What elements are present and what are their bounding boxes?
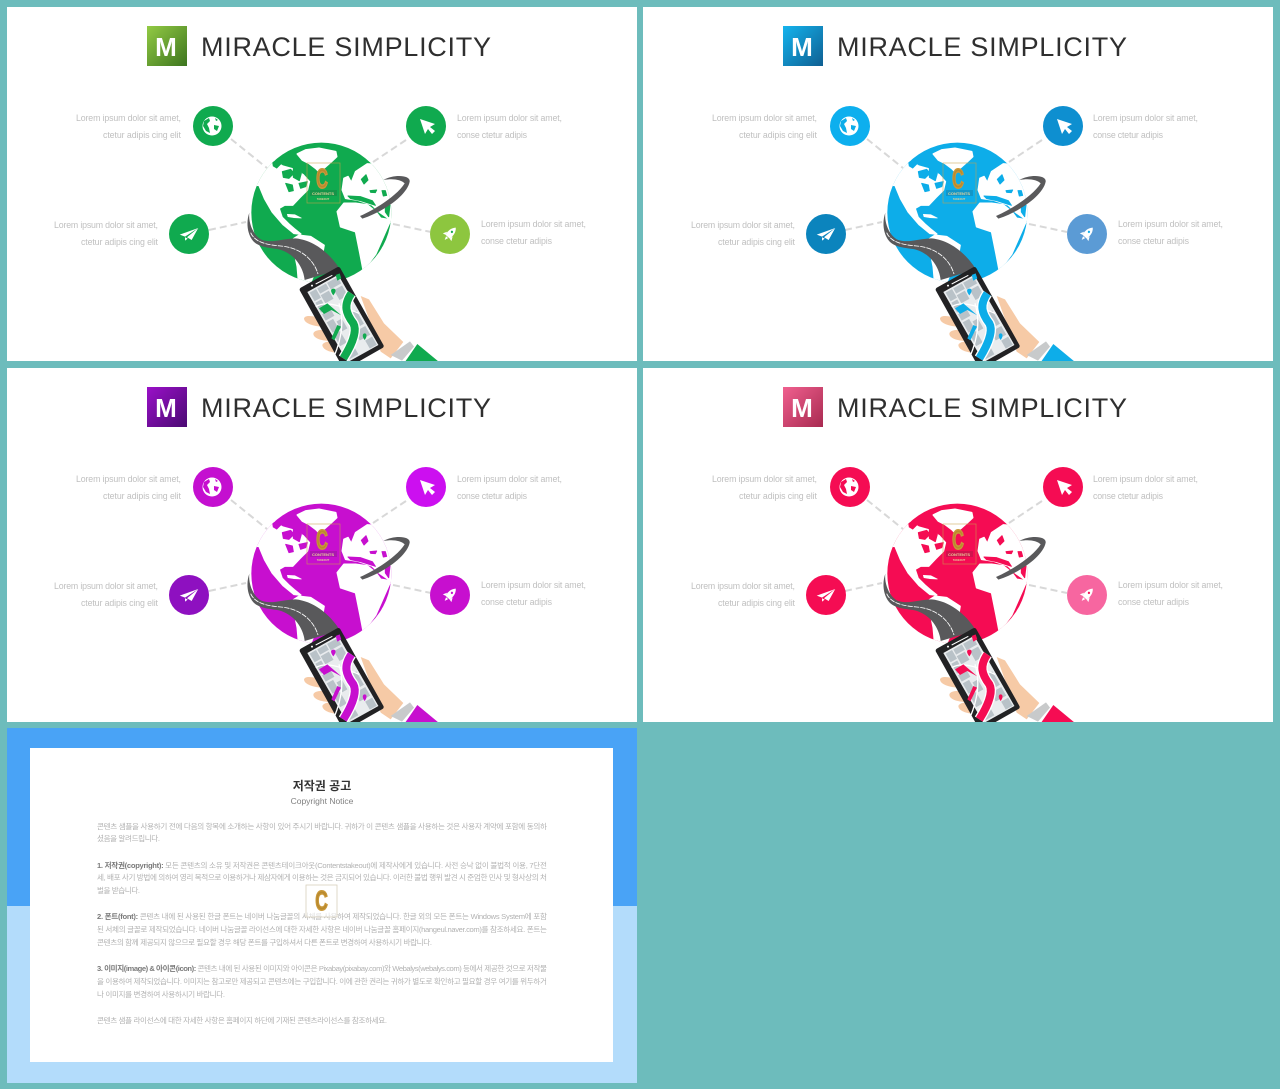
text block: copyright (97, 860, 547, 895)
text block: top left: Lorem ipsum dolor sit amet, (712, 474, 817, 484)
icon: paper plane (806, 575, 846, 615)
phone in hand (302, 269, 441, 367)
icon: M badge (147, 387, 187, 427)
text block: image and icon: 3. 이미지(image) & 아이콘(icon): 콘텐츠 내에 된 사용된 이미지와 아이콘은 Pixabay(pixabay.com)와 Webalys(webalys.com) 등에서 제공한 것으로 저작물 (97, 963, 547, 973)
text block: top right: Lorem ipsum dolor sit amet, (457, 474, 562, 484)
logo mark (306, 885, 337, 917)
icon: globe (830, 106, 870, 146)
text block: image and icon: 을 이용하여 제작되었습니다. 이미지는 참고로만 제공되고 콘텐츠에는 구입합니다. 이에 관한 권리는 귀하가 별도로 확인하고 필요할 경우 여기를 위두하거 (97, 976, 547, 986)
icon: rocket (430, 575, 470, 615)
globe with road (880, 504, 1046, 648)
text block: top right: conse ctetur adipis (457, 130, 528, 140)
icon: rocket (1067, 214, 1107, 254)
text block: top left (712, 113, 818, 140)
text block: top left: Lorem ipsum dolor sit amet, (712, 113, 817, 123)
heading: copyright notice (291, 778, 354, 806)
text block: image and icon (97, 963, 547, 999)
icon: cursor (406, 106, 446, 146)
icon: globe (193, 467, 233, 507)
title: MIRACLE SIMPLICITY (837, 32, 1127, 62)
icon: M badge (783, 26, 823, 66)
heading: copyright notice: Copyright Notice (291, 796, 354, 806)
text block: bottom right: conse ctetur adipis (481, 236, 553, 246)
icon: paper plane (169, 575, 209, 615)
text block: bottom right (1118, 219, 1223, 246)
text block: copyright: 1. 저작권(copyright): 모든 콘텐츠의 소유 및 저작권은 콘텐츠테이크아웃(Contentstakeout)에 제작사에게 있습니다. 사전 승낙 없이 불법적 이용, 7단전 (97, 860, 547, 870)
text block: bottom left (691, 220, 796, 247)
text block: copyright: 벌을 받습니다. (97, 885, 140, 895)
globe with road (244, 143, 410, 287)
logo mark (307, 162, 340, 203)
text block: top right (1093, 113, 1198, 140)
text block: bottom right (481, 580, 586, 607)
text block: bottom right: conse ctetur adipis (1118, 597, 1190, 607)
icon: rocket (430, 214, 470, 254)
text block: bottom left: Lorem ipsum dolor sit amet, (54, 581, 158, 591)
text block: bottom right: conse ctetur adipis (481, 597, 553, 607)
text block: top right: Lorem ipsum dolor sit amet, (457, 113, 562, 123)
text block: intro (97, 821, 547, 843)
text block: font: 된 서체의 글꼴로 제작되었습니다. 네이버 나눔글꼴 라이선스에 대한 자세한 사항은 네이버 나눔글꼴 홈페이지(hangeul.naver.com)를 참조하세요. 폰트는 (97, 924, 547, 934)
text block: font: 2. 폰트(font): 콘텐츠 내에 된 사용된 한글 폰트는 네이버 나눔글꼴의 서체를 사용하여 제작되었습니다. 한글 외의 모든 폰트는 Windows System에 포함 (97, 911, 547, 921)
logo mark: C (315, 885, 328, 916)
text block: top right: conse ctetur adipis (457, 491, 528, 501)
text block: bottom right: Lorem ipsum dolor sit amet, (1118, 580, 1223, 590)
text block: top right (457, 113, 562, 140)
title: MIRACLE SIMPLICITY (201, 393, 491, 423)
text block: top right: conse ctetur adipis (1093, 491, 1164, 501)
text block: top left: ctetur adipis cing elit (739, 130, 818, 140)
icon: cursor (406, 467, 446, 507)
icon: globe (193, 106, 233, 146)
text block: top left: Lorem ipsum dolor sit amet, (76, 474, 181, 484)
heading: copyright notice: 저작권 공고 (293, 778, 351, 793)
text block: top left (76, 113, 182, 140)
panel: pink slide (643, 368, 1274, 728)
text block: bottom right: Lorem ipsum dolor sit amet, (1118, 219, 1223, 229)
text block: bottom right: Lorem ipsum dolor sit amet, (481, 219, 586, 229)
icon: cursor (1043, 467, 1083, 507)
title: MIRACLE SIMPLICITY (837, 393, 1127, 423)
panel: green slide (7, 7, 637, 367)
text block: top left: Lorem ipsum dolor sit amet, (76, 113, 181, 123)
icon: paper plane (806, 214, 846, 254)
title: MIRACLE SIMPLICITY (201, 32, 491, 62)
text block: bottom left (691, 581, 796, 608)
icon: M badge (783, 387, 823, 427)
text block: top left: ctetur adipis cing elit (739, 491, 818, 501)
icon: paper plane (169, 214, 209, 254)
icon: rocket (1067, 575, 1107, 615)
text block: bottom right (481, 219, 586, 246)
text block: top left (76, 474, 182, 501)
text block: top right: Lorem ipsum dolor sit amet, (1093, 113, 1198, 123)
phone in hand (938, 269, 1077, 367)
text block: bottom left (54, 220, 159, 247)
text block: copyright: 세, 배포 사기 방법에 의하여 영리 목적으로 이용하거나 제삼자에게 이용하는 것은 금지되어 있습니다. 이러한 불법 행위 발견 시 준엄한 민사 및 형사상의 처 (97, 872, 547, 882)
globe with road (244, 504, 410, 648)
text block: bottom left: Lorem ipsum dolor sit amet, (691, 220, 795, 230)
text block: top left (712, 474, 818, 501)
icon: cursor (1043, 106, 1083, 146)
text block: top right (457, 474, 562, 501)
text block: top right: Lorem ipsum dolor sit amet, (1093, 474, 1198, 484)
text block: top right: conse ctetur adipis (1093, 130, 1164, 140)
text block: bottom left: ctetur adipis cing elit (718, 598, 796, 608)
text block: bottom left (54, 581, 159, 608)
panel: purple slide (7, 368, 637, 728)
text block: font (97, 911, 547, 947)
logo mark (307, 523, 340, 564)
text block: bottom right (1118, 580, 1223, 607)
icon: M badge: M (791, 393, 813, 423)
text block: intro: 콘텐츠 샘플을 사용하기 전에 다음의 항목에 소개하는 사항이 있어 주시기 바랍니다. 귀하가 이 콘텐츠 샘플을 사용하는 것은 사용자 계약에 포함에 동의하 (97, 821, 547, 831)
text block: bottom right: Lorem ipsum dolor sit amet, (481, 580, 586, 590)
logo mark (943, 523, 976, 564)
text block: bottom left: Lorem ipsum dolor sit amet, (54, 220, 158, 230)
text block: top left: ctetur adipis cing elit (103, 491, 182, 501)
panel: blue slide (643, 7, 1274, 367)
text block: image and icon: 나 이미지를 변경하여 사용하시기 바랍니다. (97, 989, 225, 999)
text block: top right (1093, 474, 1198, 501)
text block: font: 콘텐츠의 함께 제공되지 않으므로 필요할 경우 해당 폰트를 구입하셔서 다른 폰트로 변경하여 사용하시기 바랍니다. (97, 937, 432, 947)
phone in hand (302, 630, 441, 728)
text block: license: 콘텐츠 샘플 라이선스에 대한 자세한 사항은 홈페이지 하단에 기재된 콘텐츠라이선스를 참조하세요. (97, 1015, 387, 1025)
logo mark (943, 162, 976, 203)
text block: intro: 셨음을 알려드립니다. (97, 833, 160, 843)
globe with road (880, 143, 1046, 287)
text block: bottom left: ctetur adipis cing elit (81, 598, 159, 608)
text block: bottom left: ctetur adipis cing elit (81, 237, 159, 247)
icon: globe (830, 467, 870, 507)
icon: M badge: M (155, 32, 177, 62)
icon: M badge: M (791, 32, 813, 62)
text block: bottom left: Lorem ipsum dolor sit amet, (691, 581, 795, 591)
icon: M badge: M (155, 393, 177, 423)
phone in hand (938, 630, 1077, 728)
text block: bottom right: conse ctetur adipis (1118, 236, 1190, 246)
panel: copyright notice (7, 728, 637, 1083)
icon: M badge (147, 26, 187, 66)
text block: bottom left: ctetur adipis cing elit (718, 237, 796, 247)
text block: top left: ctetur adipis cing elit (103, 130, 182, 140)
